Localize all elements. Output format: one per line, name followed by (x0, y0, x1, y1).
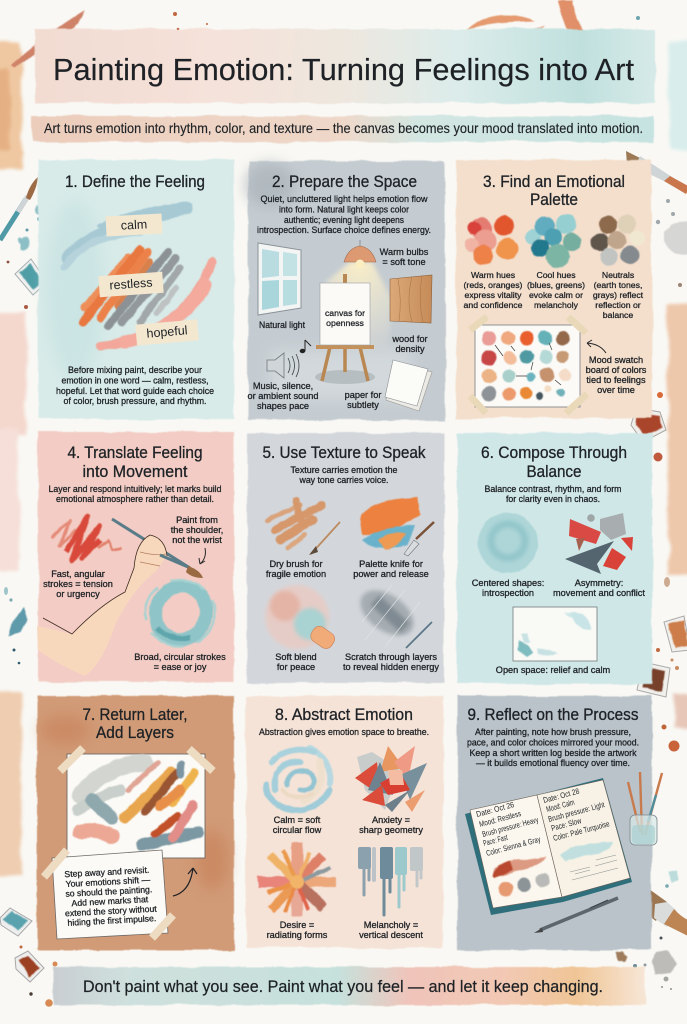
swatches: neutrals (591, 215, 645, 266)
label: wood for density: wood for (391, 334, 428, 344)
body text 1: of color, brush pressure, and rhythm. (64, 395, 206, 406)
label: paper for subtlety: subtlety (347, 400, 379, 410)
body text 1 (56, 364, 214, 406)
painted ring (145, 578, 215, 648)
heading 5: 5. Use Texture to Speak (262, 444, 426, 462)
label: music: shapes pace (257, 401, 309, 411)
jar of brushes (628, 772, 662, 845)
swatches: cool hues (525, 214, 581, 268)
panel 6: compose through balance (457, 433, 653, 684)
body text 9: pace, and color choices mirrored your mood. (467, 736, 639, 748)
open space sheet (513, 607, 597, 661)
labels: balance: Asymmetry: (575, 578, 623, 588)
captions: hues: Neutrals (602, 270, 635, 280)
panel 5: use texture to speak (247, 433, 444, 683)
label: paint from the shoulder: not the wrist (172, 535, 222, 545)
label: wood for density: density (395, 344, 425, 354)
heading 4: into Movement (82, 463, 188, 481)
body text 4: Layer and respond intuitively; let marks build (48, 483, 222, 494)
body text 2 (257, 193, 431, 235)
swatches: warm hues (465, 216, 518, 265)
labels: calm and anxiety: circular flow (273, 825, 322, 835)
label: broad circular: = ease or joy (154, 662, 207, 672)
label: broad circular: Broad, circular strokes (134, 652, 226, 662)
label: paint from the shoulder (171, 515, 223, 545)
centered circle (478, 513, 538, 573)
label: wood for density (391, 334, 428, 354)
scratch texture (352, 581, 432, 648)
note card: so should the painting. (65, 884, 153, 899)
icon: paper (385, 360, 432, 411)
labels: balance (472, 578, 645, 598)
icon: window (258, 243, 301, 315)
body text 2: Quiet, uncluttered light helps emotion flow (260, 193, 428, 204)
heading 2: 2. Prepare the Space (272, 173, 417, 191)
label: soft blend: Soft blend (275, 652, 317, 662)
heading 4 (68, 444, 202, 481)
vertical drips (358, 847, 423, 915)
arrow to board (587, 340, 606, 353)
journal entry: right page: Mood: Calm (545, 798, 576, 814)
heading 6: Balance (526, 463, 582, 481)
body text 4 (48, 483, 222, 504)
note card: Add new marks that (71, 894, 149, 908)
label: music (248, 381, 318, 411)
captions: hues: grays) reflect (593, 290, 644, 300)
heading 3: 3. Find an Emotional (483, 173, 625, 191)
pen (534, 898, 618, 933)
asymmetric shapes (565, 513, 633, 574)
labels: calm and anxiety: sharp geometry (359, 825, 423, 835)
labels: balance: movement and conflict (553, 588, 645, 598)
brush strokes with word tags (64, 205, 212, 346)
captions: hues: (blues, greens) (527, 280, 585, 290)
panel 1: define the feeling (38, 160, 234, 419)
captions: hues (464, 270, 644, 320)
captions: hues: Cool hues (536, 270, 576, 280)
footer text: Don't paint what you see. Paint what you feel — and let it keep changing. (83, 977, 603, 996)
main title: Painting Emotion: Turning Feelings into Art (53, 52, 634, 87)
label: warm bulbs: Warm bulbs (380, 247, 429, 257)
label: paint from the shoulder: the shoulder, (171, 525, 223, 535)
body text 9: Keep a short written log beside the artwork (470, 747, 637, 758)
label: canvas for openness: openness (326, 318, 364, 328)
panel 3: emotional palette (456, 160, 652, 418)
captions: hues: balance (603, 310, 633, 320)
label: paper for subtlety: paper for (345, 390, 381, 400)
labels: calm and anxiety (273, 815, 423, 835)
captions: hues: express vitality (465, 290, 522, 300)
body text 6: for clarity even in chaos. (506, 493, 600, 504)
journal swatches (493, 842, 613, 896)
panel 9: reflect on the process (457, 696, 662, 950)
labels: desire and melancholy (267, 920, 423, 940)
panel 8: abstract emotion (246, 696, 443, 948)
captions: hues: Warm hues (471, 270, 516, 280)
captions: hues: evoke calm or (529, 290, 583, 300)
tape pieces (44, 748, 213, 938)
heading 1: 1. Define the Feeling (65, 173, 205, 191)
labels: desire and melancholy: Desire = (280, 920, 314, 930)
label: canvas for openness: canvas for (325, 308, 365, 318)
body text 1: Before mixing paint, describe your (68, 364, 202, 375)
star geometry (355, 746, 427, 812)
heading 7: Add Layers (96, 724, 174, 742)
panel 4: translate feeling into movement (37, 432, 234, 682)
journal entry: right page: Date: Oct 28 (542, 787, 581, 805)
body text 9: — it builds emotional fluency over time. (476, 757, 630, 768)
icon: hanging lamp (344, 240, 376, 268)
heading 3: Palette (530, 191, 578, 209)
label: warm bulbs (380, 247, 429, 267)
label: mood swatch board: Mood swatch (589, 355, 643, 365)
captions: hues: and confidence (464, 300, 523, 310)
journal entry: left page: Date: Oct 26 (475, 800, 516, 819)
footer band (54, 967, 646, 1005)
label: palette knife: Palette knife for (359, 559, 423, 569)
label: mood swatch board (586, 355, 647, 395)
word tag: restless (98, 272, 164, 297)
label: music: Music, silence, (253, 381, 313, 391)
heading 6: 6. Compose Through (481, 444, 627, 462)
subtitle band (32, 116, 654, 142)
journal entry: left page: Pace: Fast (482, 833, 509, 848)
word tag: calm: calm (120, 217, 148, 233)
label: paint from the shoulder: Paint from (176, 515, 218, 525)
labels: desire and melancholy: vertical descent (359, 930, 423, 940)
heading 8: 8. Abstract Emotion (275, 706, 413, 724)
light cone (326, 262, 392, 350)
body text 6 (484, 483, 622, 504)
label: music: or ambient sound (248, 391, 318, 401)
word tag: calm (106, 214, 162, 236)
spiral (266, 748, 330, 810)
heading 7: 7. Return Later, (82, 706, 188, 724)
label: open space: Open space: relief and calm (496, 665, 611, 675)
label: fast strokes (43, 569, 113, 599)
journal entry: right page: Brush pressure: Light (547, 800, 606, 824)
curved arrow (173, 868, 197, 896)
subtitle text: Art turns emotion into rhythm, color, and texture — the canvas becomes your mood translated into motion. (44, 120, 643, 136)
body text 9 (467, 726, 639, 768)
mood swatch board (470, 317, 587, 413)
labels: desire and melancholy: radiating forms (267, 930, 328, 940)
small arrow (199, 548, 205, 564)
word tag: hopeful (135, 319, 199, 346)
labels: balance: Centered shapes: (472, 578, 544, 588)
labels: calm and anxiety: Anxiety = (372, 815, 410, 825)
red zigzag strokes (52, 516, 122, 560)
dry brush texture (268, 500, 340, 555)
title band (35, 29, 655, 103)
icon: wood panel (390, 275, 432, 323)
journal entry: right page (542, 787, 611, 843)
label: soft blend (275, 652, 317, 672)
body text 1: hopeful. Let that word guide each choice (56, 385, 214, 396)
label: soft blend: for peace (277, 662, 315, 672)
labels: balance: introspection (482, 588, 534, 598)
arm and brush (37, 519, 203, 676)
heading 9: 9. Reflect on the Process (468, 706, 638, 724)
label: paper for subtlety (345, 390, 381, 410)
label: dry brush: fragile emotion (266, 569, 326, 579)
label: warm bulbs: = soft tone (382, 257, 426, 267)
body text 6: Balance contrast, rhythm, and form (484, 483, 622, 494)
soft blend with sponge (265, 585, 337, 651)
body text 1: emotion in one word — calm, restless, (62, 374, 208, 386)
label: fast strokes: Fast, angular (51, 569, 105, 579)
heading 6 (481, 444, 627, 481)
body text 5 (290, 464, 398, 485)
word tag: hopeful: hopeful (146, 323, 188, 341)
label: dry brush: Dry brush for (269, 559, 323, 569)
captions: hues: melancholy (534, 300, 579, 310)
label: mood swatch board: over time (597, 385, 635, 395)
label: scratch (343, 652, 439, 672)
body text 9: After painting, note how brush pressure, (475, 726, 631, 737)
journal entry: left page: Color: Sienna & Gray (485, 835, 542, 858)
note card: Step away and revisit. (64, 865, 150, 879)
label: fast strokes: strokes = tension (43, 579, 113, 589)
journal entry: left page: Mood: Restless (478, 809, 522, 829)
captions: hues: (earth tones, (594, 280, 642, 290)
journal entry: left page (475, 800, 542, 858)
heading 4: 4. Translate Feeling (68, 444, 202, 462)
note card: hiding the first impulse. (67, 913, 156, 928)
body text 2: into form. Natural light keeps color (279, 204, 409, 214)
easel and canvas (315, 274, 375, 384)
heading 3 (483, 173, 625, 209)
word tag: restless: restless (109, 276, 153, 292)
body text 5: Texture carries emotion the (290, 464, 398, 475)
note card (52, 850, 168, 939)
journal entry: right page: Pace: Slow (550, 816, 583, 833)
note card: Your emotions shift — (65, 875, 151, 889)
body text 2: introspection. Surface choice defines energy. (257, 224, 431, 235)
label: palette knife (353, 559, 429, 579)
open journal (465, 778, 632, 915)
label: scratch: to reveal hidden energy (343, 662, 439, 672)
palette knife smear (360, 498, 434, 556)
label: mood swatch board: board of colors (586, 365, 647, 375)
journal entry: right page: Color: Pale Turquoise (552, 819, 611, 843)
body text 5: way tone carries voice. (299, 474, 388, 485)
labels: desire and melancholy: Melancholy = (364, 920, 418, 930)
pinned abstract painting (67, 754, 205, 858)
label: mood swatch board: tied to feelings (586, 375, 646, 385)
panel 2: prepare the space (245, 161, 445, 420)
body text 4: emotional atmosphere rather than detail. (56, 493, 214, 504)
panel 7: return later, add layers (37, 696, 234, 950)
label: fast strokes: or urgency (56, 589, 100, 599)
note card: extend the story without (65, 904, 157, 918)
label: dry brush (266, 559, 326, 579)
label: scratch: Scratch through layers (345, 652, 437, 662)
journal entry: left page: Brush pressure: Heavy (481, 815, 540, 839)
label: palette knife: power and release (353, 569, 429, 579)
heading 7 (82, 706, 188, 742)
captions: hues: reflection or (595, 300, 641, 310)
icon: speaker and note (267, 340, 311, 378)
label: natural light: Natural light (259, 320, 305, 330)
captions: hues: (reds, oranges) (464, 280, 523, 290)
labels: calm and anxiety: Calm = soft (274, 815, 321, 825)
label: broad circular (134, 652, 226, 672)
body text 8: Abstraction gives emotion space to breathe. (259, 726, 429, 737)
body text 2: authentic; evening light deepens (284, 214, 404, 225)
radiating burst (258, 843, 336, 917)
label: canvas for openness (325, 308, 365, 328)
